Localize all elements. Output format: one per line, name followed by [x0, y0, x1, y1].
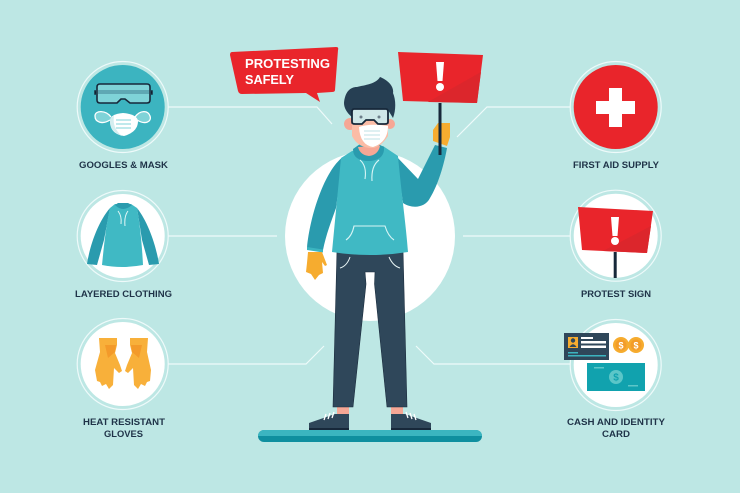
socks [337, 405, 403, 415]
label: HEAT RESISTANT [83, 417, 165, 428]
hair [344, 77, 395, 118]
ears [344, 118, 395, 130]
icon: coins [613, 337, 644, 353]
icon: coins: $ [618, 340, 624, 350]
eyes [360, 116, 380, 118]
shoes [309, 414, 431, 430]
icon: sign [578, 207, 653, 278]
item: heat resistant gloves: GLOVES [104, 429, 143, 440]
protest sign [398, 52, 483, 103]
speech bubble: PROTESTING [245, 56, 330, 71]
mask [359, 125, 388, 147]
right arm [396, 145, 447, 207]
icon: goggles [95, 84, 152, 103]
hood and neck [353, 144, 384, 161]
sign stick [438, 103, 442, 155]
drawstrings and pocket [346, 160, 394, 240]
item: cash and identity card: CARD [602, 429, 630, 440]
goggles [352, 109, 388, 124]
label: FIRST AID SUPPLY [573, 160, 660, 171]
label: PROTEST SIGN [581, 289, 651, 300]
face [352, 105, 388, 148]
item: cash and identity card [564, 320, 666, 440]
item: layered clothing [75, 190, 172, 300]
icon: mask [95, 112, 150, 136]
speech bubble [230, 47, 338, 102]
label: LAYERED CLOTHING [75, 289, 172, 300]
platform [258, 430, 482, 442]
label: CASH AND IDENTITY [567, 417, 666, 428]
icon: cross [596, 88, 635, 127]
item: heat resistant gloves [77, 318, 168, 440]
white backdrop circle [285, 151, 455, 321]
item: protest sign [570, 190, 661, 300]
item: goggles and mask [77, 62, 168, 171]
speech bubble: SAFELY [245, 72, 294, 87]
icon: gloves [95, 338, 151, 389]
icon: coins: $ [633, 340, 639, 350]
icon: identity card [564, 333, 609, 360]
hoodie body [332, 146, 408, 255]
character [306, 77, 450, 430]
item: first aid supply [570, 62, 661, 171]
icon: hoodie [87, 203, 159, 267]
left arm [307, 157, 343, 250]
left glove [306, 252, 327, 280]
icon: banknote: $ [613, 372, 619, 384]
trousers [333, 250, 407, 407]
hand glove [433, 123, 450, 146]
pocket marks [340, 257, 400, 268]
label: GOOGLES & MASK [79, 160, 168, 171]
